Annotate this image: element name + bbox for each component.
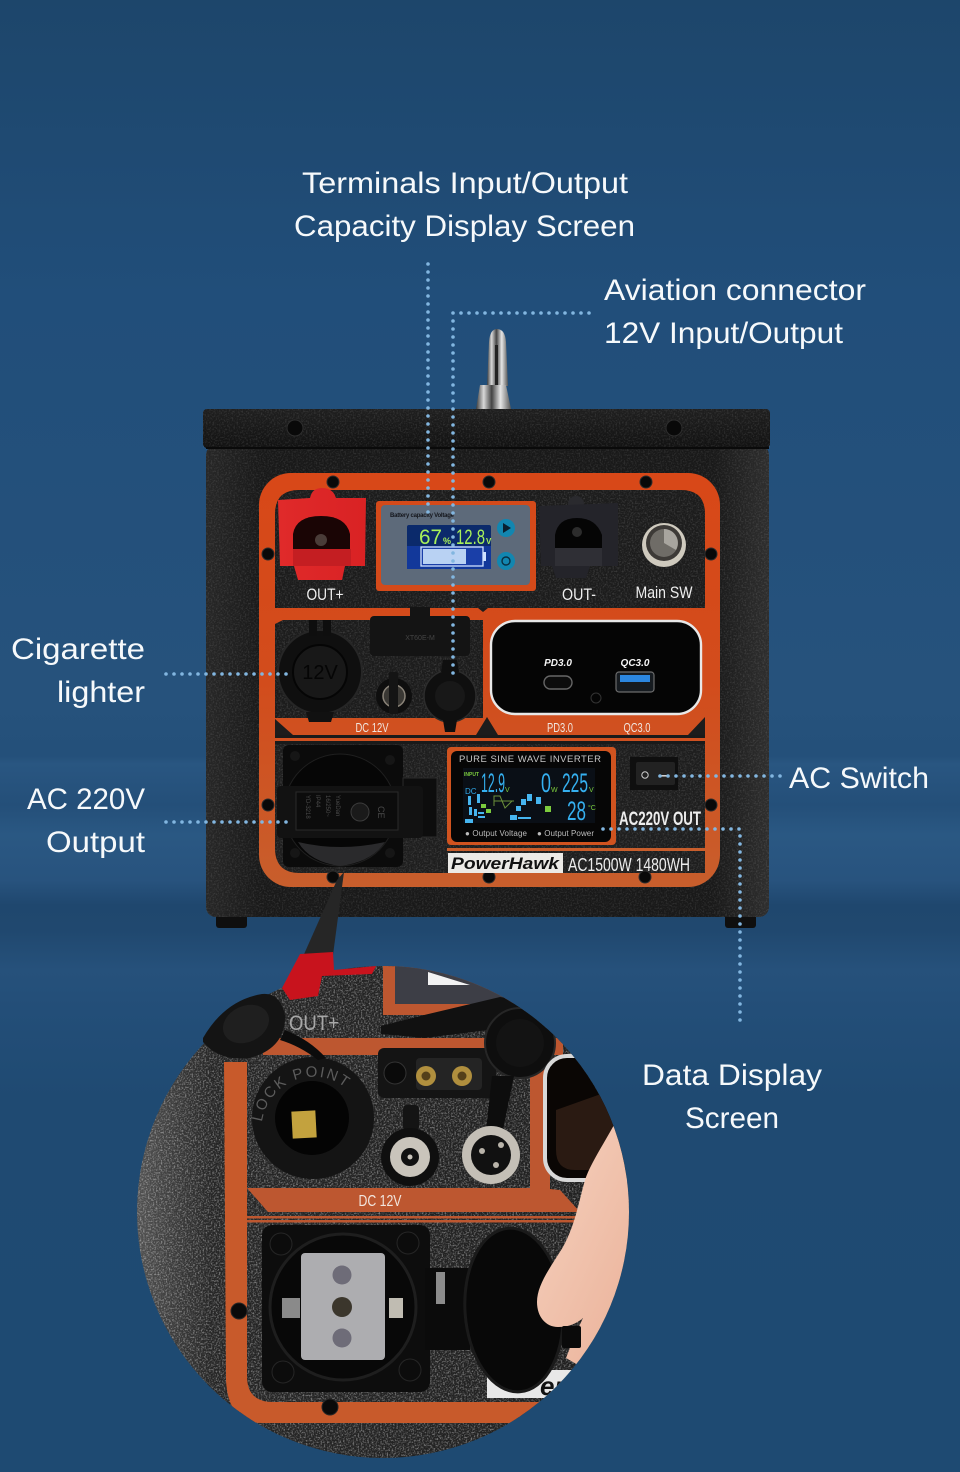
battery capacity display: 67 [419, 526, 442, 549]
outlet flap held open [464, 1226, 562, 1394]
orange frame left and bottom [224, 1062, 540, 1423]
lid screws [287, 420, 682, 436]
XT60 connector cover: XT60E-M [405, 635, 435, 642]
magnified aviation plug [462, 1126, 520, 1184]
XT60 connector cover [370, 607, 470, 656]
label: aviation connector: 12V Input/Output [604, 317, 844, 350]
rating text: AC1500W 1480WH [568, 855, 690, 875]
USB port labels: PD3.0 [547, 720, 573, 735]
callout line: AC switch [660, 774, 786, 778]
inverter data display: 0 [541, 768, 551, 798]
callout line: terminals display [426, 264, 430, 518]
magnified OUT+ label: OUT+ [289, 1012, 339, 1035]
device body [206, 445, 769, 917]
carry handle [476, 329, 511, 409]
divider lines [275, 735, 705, 744]
thin orange rule [447, 848, 705, 851]
device surface grain [203, 409, 770, 917]
magnified detail circle [137, 952, 629, 1458]
label: data display screen [642, 1059, 822, 1135]
orange control panel frame [259, 473, 720, 887]
cap strap [486, 1076, 514, 1130]
device lid [203, 409, 770, 448]
OUT+ label: OUT+ [306, 585, 344, 604]
AC220V OUT label: AC220V OUT [619, 809, 701, 830]
USB port labels [547, 720, 650, 735]
device feet [216, 910, 756, 928]
DC 12V label: DC 12V [356, 720, 389, 735]
magnifier clipped contents [137, 966, 629, 1458]
magnified cigarette socket [252, 1057, 374, 1179]
thin orange rules [247, 1216, 587, 1222]
label: terminals input/output [294, 167, 635, 243]
OUT+ terminal cap [278, 488, 366, 580]
AC outlet with flap [277, 745, 437, 867]
label: AC 220V output [27, 783, 146, 859]
inverter data display: ● Output Voltage [465, 829, 528, 838]
panel lower recess [275, 744, 705, 873]
USB port panel [491, 621, 701, 714]
magnified screws [231, 1303, 338, 1415]
USB port panel: QC3.0 [621, 658, 650, 669]
flap tab [562, 1326, 581, 1348]
DC 12V orange band [247, 1188, 580, 1212]
callout line: AC output [166, 820, 288, 824]
magnified textured base [130, 960, 640, 1465]
inverter data display: ● Output Power [537, 829, 594, 838]
panel dark corner notches [275, 717, 705, 735]
battery capacity display [376, 501, 536, 591]
magnified brand plate [487, 1370, 572, 1398]
callout line: data display [603, 829, 740, 1022]
AC outlet with flap: CE [376, 806, 386, 819]
AC rocker switch [630, 757, 678, 790]
recess grain [275, 490, 705, 873]
magnifier rubber cap overflow [203, 994, 285, 1059]
outlet mounting plate [262, 1225, 430, 1392]
screen reflection [556, 1094, 626, 1170]
magnified aviation cap [485, 1008, 555, 1078]
XT60 plate [378, 1048, 496, 1098]
OUT- label: OUT- [562, 585, 596, 604]
magnified grain [130, 960, 640, 1465]
magnifier red terminal cap overflow [282, 952, 376, 1000]
inverter data display: V [589, 787, 594, 794]
AC outlet with flap: YD-3218 [304, 795, 310, 819]
orange top band [263, 1038, 563, 1055]
DC 12V magnified label: DC 12V [358, 1193, 402, 1210]
label: AC 220V output: AC 220V [27, 783, 145, 816]
USB port panel: PD3.0 [544, 658, 572, 669]
inverter data display: W [551, 787, 558, 794]
black terminal clip [381, 997, 520, 1038]
outlet hinge [430, 1268, 470, 1350]
magnified battery display corner [383, 966, 513, 1015]
inverter data display: 12.9 [481, 768, 505, 798]
inverter data display: °C [588, 804, 596, 812]
label: cigarette lighter [11, 633, 145, 709]
panel screws [262, 476, 717, 883]
DC barrel jack [376, 672, 412, 714]
cigarette lighter socket [278, 620, 362, 722]
hand [537, 1126, 629, 1364]
battery capacity display: Battery capacity Voltage [390, 513, 455, 519]
magnified cigarette socket: LOCK POINT [252, 1066, 350, 1121]
magnified DC barrel jack [381, 1105, 439, 1186]
inverter data display: PURE SINE WAVE INVERTER [459, 754, 601, 765]
Main SW label: Main SW [636, 583, 692, 602]
aviation connector cap [424, 660, 476, 732]
battery capacity display: 12.8 [456, 526, 485, 549]
lid seam [206, 447, 769, 449]
label: AC 220V output: Output [46, 826, 146, 859]
label: aviation connector [604, 274, 866, 350]
panel middle-left recess [275, 620, 483, 718]
magnified USB panel rim [543, 1054, 628, 1182]
main switch button [642, 523, 686, 567]
label: data display screen: Screen [685, 1102, 779, 1135]
label: terminals input/output: Capacity Display Screen [294, 210, 635, 243]
battery capacity display: V [486, 537, 492, 546]
inverter data display [447, 747, 616, 845]
panel upper recess [275, 490, 705, 612]
AC outlet with flap: IP44 [314, 795, 320, 808]
label: data display screen: Data Display [642, 1059, 822, 1092]
inverter data display: DC [465, 787, 477, 796]
inverter data display: INPUT [464, 772, 479, 778]
PowerHawk brand plate: PowerHawk [451, 854, 561, 873]
label: AC switch: AC Switch [789, 762, 929, 795]
socket strap [280, 1030, 326, 1060]
product: power station [203, 329, 770, 928]
label: aviation connector: Aviation connector [604, 274, 866, 307]
callout wedge to magnifier [297, 872, 344, 970]
AC outlet with flap: YueDan [334, 795, 340, 816]
USB port labels: QC3.0 [624, 720, 650, 735]
inverter data display: 225 [562, 768, 588, 798]
label: terminals input/output: Terminals Input/Output [302, 167, 629, 200]
inverter data display: 28 [567, 796, 586, 826]
outlet grey insert [282, 1253, 403, 1360]
callout line: aviation connector [453, 313, 589, 680]
callout line: cigarette lighter [166, 672, 288, 676]
label: cigarette lighter: lighter [57, 676, 145, 709]
battery capacity display: % [443, 536, 451, 546]
AC outlet with flap: 16/250~ [324, 795, 330, 817]
inverter data display: V [505, 787, 510, 794]
magnified brand plate: er [540, 1371, 566, 1401]
OUT- terminal cap [539, 496, 618, 578]
orange right strip [530, 1069, 550, 1189]
cigarette lighter socket: 12V [302, 662, 338, 684]
label: cigarette lighter: Cigarette [11, 633, 145, 666]
